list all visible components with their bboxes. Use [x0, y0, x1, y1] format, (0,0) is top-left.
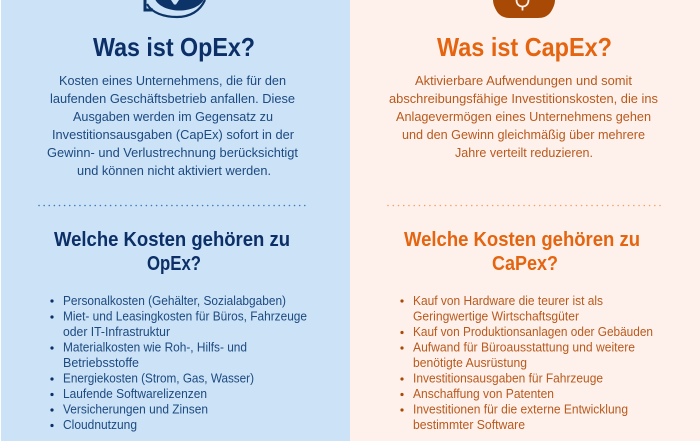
- text block: OpEx definition: Ausgaben werden im Gegensatz zu: [73, 109, 273, 124]
- text block: OpEx definition: und können nicht aktiviert werden.: [77, 163, 271, 178]
- list: CapEx costs: Investitionen für die externe Entwicklung: [413, 402, 628, 416]
- list: OpEx costs: Betriebsstoffe: [63, 355, 139, 370]
- text block: OpEx definition: Investitionsausgaben (CapEx) sofort in der: [52, 127, 295, 142]
- text block: CapEx definition: Anlagevermögen eines Unternehmens gehen: [396, 109, 651, 124]
- list: OpEx costs: oder IT-Infrastruktur: [63, 324, 171, 339]
- list: CapEx costs: benötigte Ausrüstung: [413, 355, 527, 370]
- icon: money bag: [493, 0, 555, 18]
- text block: CapEx definition: und den Gewinn gleichmäßig über mehrere: [402, 127, 645, 142]
- list: OpEx costs: Personalkosten (Gehälter, Sozialabgaben): [63, 293, 286, 308]
- heading: Welche Kosten CaPex: CaPex?: [492, 252, 558, 275]
- text block: CapEx definition: Jahre verteilt reduzieren.: [455, 145, 593, 160]
- icon: circular arrow with coin: [144, 0, 205, 17]
- list: OpEx costs: Versicherungen und Zinsen: [63, 402, 208, 416]
- text block: CapEx definition: Aktivierbare Aufwendungen und somit: [415, 73, 632, 88]
- text block: OpEx definition: [47, 73, 298, 178]
- list: CapEx costs: Aufwand für Büroausstattung und weitere: [413, 340, 635, 354]
- title: Was ist OpEx?: Was ist OpEx?: [93, 32, 255, 62]
- text block: CapEx definition: abschreibungsfähige Investitionskosten, die ins: [389, 91, 658, 106]
- list: OpEx costs: Cloudnutzung: [63, 417, 137, 432]
- text block: OpEx definition: laufenden Geschäftsbetrieb anfallen. Diese: [50, 91, 295, 106]
- list: OpEx costs: Materialkosten wie Roh-, Hilfs- und: [63, 340, 247, 354]
- heading: Welche Kosten OpEx: OpEx?: [147, 252, 201, 275]
- title: Was ist CapEx?: Was ist CapEx?: [437, 32, 612, 62]
- heading: Welche Kosten OpEx: [54, 228, 290, 275]
- text block: OpEx definition: Gewinn- und Verlustrechnung berücksichtigt: [47, 145, 298, 160]
- list: CapEx costs: Kauf von Hardware die teurer ist als: [413, 293, 603, 308]
- list: OpEx costs: [50, 293, 307, 432]
- list: CapEx costs: [400, 293, 653, 432]
- list: CapEx costs: Geringwertige Wirtschaftsgüter: [413, 308, 580, 324]
- list: OpEx costs: Miet- und Leasingkosten für Büros, Fahrzeuge: [63, 308, 307, 324]
- list: OpEx costs: Energiekosten (Strom, Gas, Wasser): [63, 370, 254, 386]
- text block: CapEx definition: [389, 73, 658, 160]
- heading: Welche Kosten CaPex: Welche Kosten gehören zu: [404, 228, 640, 251]
- panel: OpEx: [1, 0, 350, 441]
- heading: Welche Kosten OpEx: Welche Kosten gehören zu: [54, 228, 290, 251]
- list: OpEx costs: Laufende Softwarelizenzen: [63, 386, 207, 401]
- panel: CapEx: [350, 0, 700, 441]
- heading: Welche Kosten CaPex: [404, 228, 640, 275]
- list: CapEx costs: Kauf von Produktionsanlagen oder Gebäuden: [413, 324, 653, 339]
- list: CapEx costs: Investitionsausgaben für Fahrzeuge: [413, 370, 603, 386]
- list: CapEx costs: Anschaffung von Patenten: [413, 386, 554, 401]
- text block: OpEx definition: Kosten eines Unternehmens, die für den: [59, 73, 286, 88]
- list: CapEx costs: bestimmter Software: [413, 417, 525, 432]
